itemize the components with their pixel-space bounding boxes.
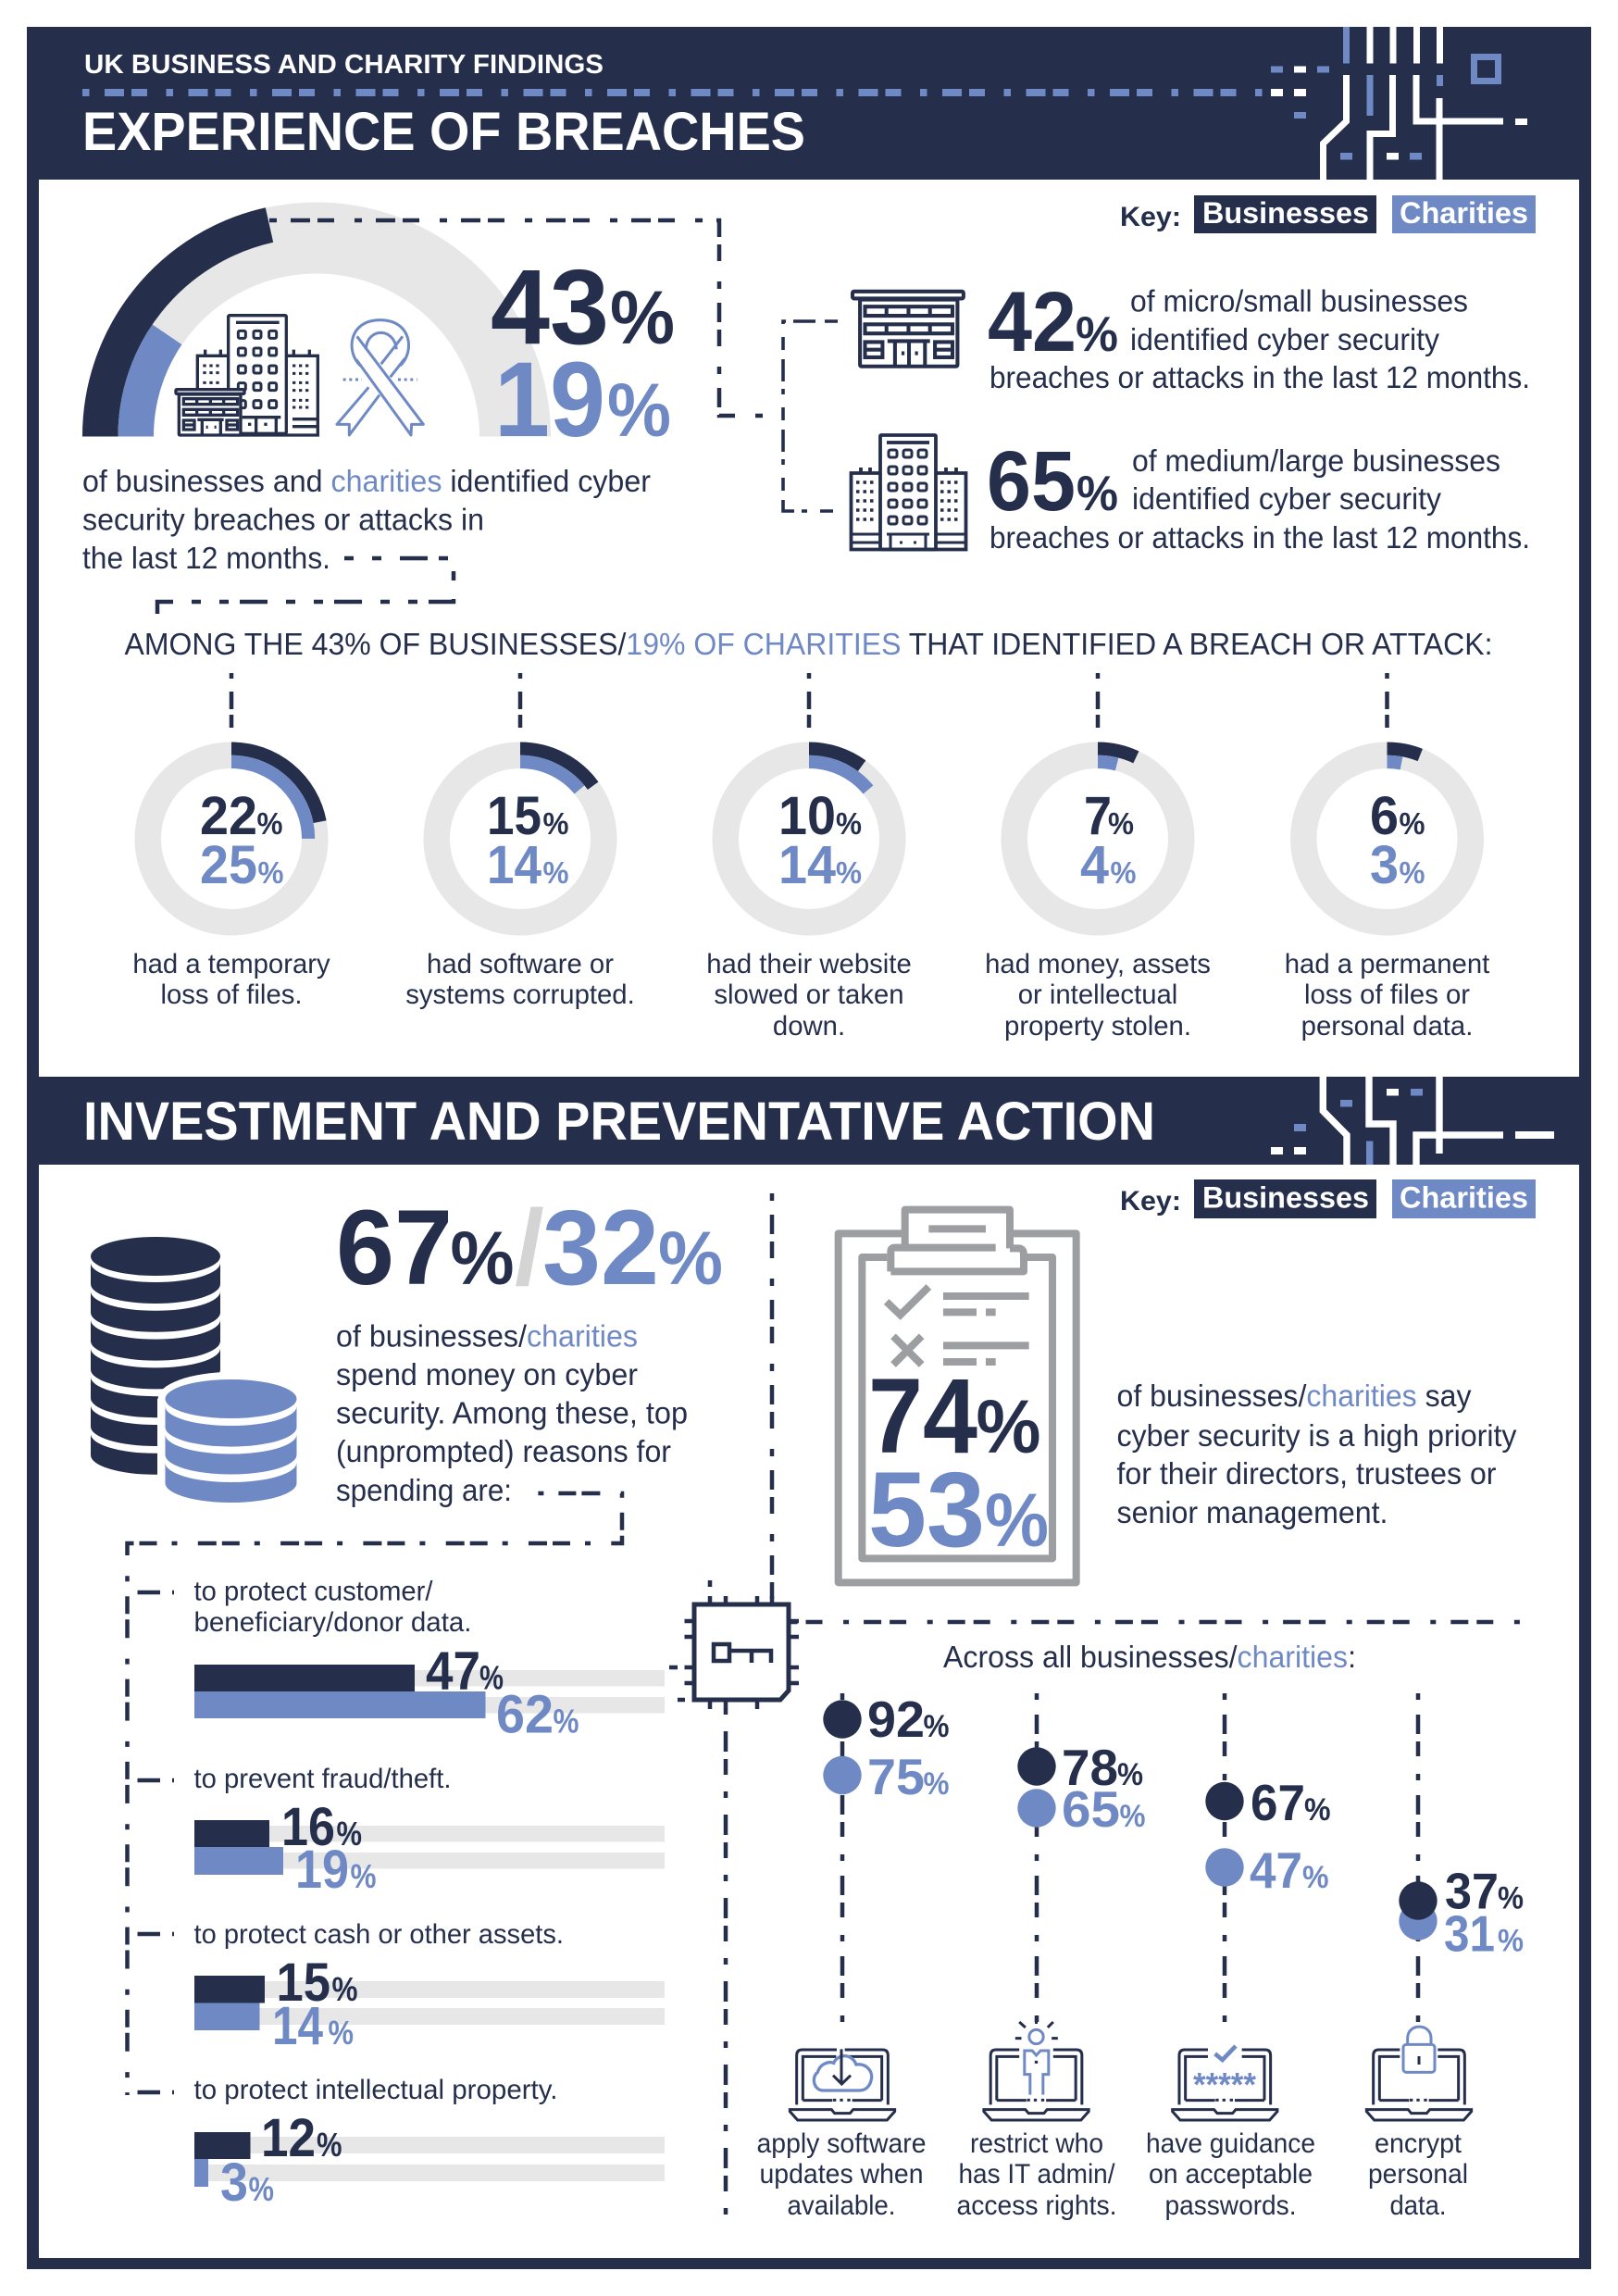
stat: micro/small businesses: 42 bbox=[988, 275, 1077, 369]
lollipop: password guidance: % bbox=[1302, 1860, 1329, 1895]
doughnut: temporary loss of files: % bbox=[257, 806, 283, 841]
doughnut: money stolen bbox=[985, 673, 1211, 1042]
header: investment and preventative action: INVESTMENT AND PREVENTATIVE ACTION bbox=[83, 1092, 1155, 1152]
stat: micro/small businesses: breaches or attacks in the last 12 months. bbox=[989, 360, 1530, 394]
doughnut: money stolen: property stolen. bbox=[1004, 1011, 1191, 1042]
doughnut: software corrupted: had software or bbox=[427, 949, 614, 980]
bar group: prevent fraud: to prevent fraud/theft. bbox=[194, 1764, 452, 1794]
big stat 19%: % bbox=[607, 368, 671, 453]
text: headline finding: the last 12 months. bbox=[82, 541, 330, 575]
lollipop: encrypt personal data: personal bbox=[1368, 2159, 1468, 2190]
text: high priority: senior management. bbox=[1116, 1495, 1388, 1529]
big stat 74%: % bbox=[976, 1385, 1040, 1469]
text: high priority: for their directors, trustees or bbox=[1116, 1456, 1496, 1491]
key: section one: Charities bbox=[1400, 196, 1528, 230]
bar group: protect customer data: to protect customer/ bbox=[194, 1576, 433, 1607]
doughnut: permanent loss: 6 bbox=[1370, 786, 1399, 846]
bar group: protect cash: 15 bbox=[276, 1953, 330, 2013]
doughnut: website slowed: % bbox=[836, 806, 862, 841]
bar group: prevent fraud: % bbox=[337, 1815, 362, 1853]
stat: micro/small businesses: of micro/small businesses bbox=[1130, 283, 1468, 318]
icon: charity ribbon bbox=[337, 320, 423, 435]
lollipop: restrict admin rights: access rights. bbox=[957, 2190, 1116, 2221]
big stat 19% bbox=[494, 341, 671, 459]
text: spending on cyber security: of businesses/charities bbox=[336, 1318, 638, 1354]
big stat 53% bbox=[868, 1451, 1049, 1569]
doughnut: software corrupted bbox=[405, 673, 635, 1010]
bar group: protect intellectual property: 3 bbox=[220, 2152, 248, 2213]
doughnut: permanent loss bbox=[1285, 673, 1489, 1042]
icon: chip with key bbox=[669, 1580, 799, 1709]
text: spending on cyber security bbox=[336, 1318, 688, 1507]
lollipop: apply software updates: updates when bbox=[759, 2159, 924, 2190]
connector: gauge to size breakdown bbox=[269, 220, 777, 416]
bar group: prevent fraud: 16 bbox=[281, 1797, 335, 1857]
text: spending on cyber security: spending are: bbox=[336, 1473, 512, 1507]
lollipop: apply software updates: apply software bbox=[757, 2128, 926, 2159]
big stat 43% bbox=[491, 248, 675, 367]
doughnut: permanent loss: had a permanent bbox=[1285, 949, 1489, 980]
icon: laptop with password: ***** bbox=[1193, 2065, 1256, 2103]
lollipop: encrypt personal data: % bbox=[1498, 1881, 1524, 1916]
doughnut: temporary loss of files: 25 bbox=[200, 835, 257, 895]
lollipop: apply software updates: 92 bbox=[867, 1691, 925, 1748]
lollipop: restrict admin rights: % bbox=[1120, 1799, 1146, 1834]
lollipop: encrypt personal data: % bbox=[1498, 1924, 1524, 1959]
text: spending on cyber security: spend money on cyber bbox=[336, 1357, 638, 1391]
big stat 74%: 74 bbox=[868, 1357, 977, 1476]
bar group: protect intellectual property bbox=[194, 2075, 665, 2213]
doughnut: website slowed bbox=[706, 673, 912, 1042]
text: high priority bbox=[1116, 1379, 1517, 1529]
lollipop: password guidance: 47 bbox=[1250, 1841, 1302, 1899]
lollipop: password guidance: on acceptable bbox=[1149, 2159, 1313, 2190]
doughnut: software corrupted: 14 bbox=[487, 835, 541, 895]
stat: medium/large businesses: of medium/large businesses bbox=[1132, 443, 1500, 478]
stat: micro/small businesses bbox=[853, 275, 1530, 394]
bar group: protect intellectual property: % bbox=[317, 2126, 342, 2164]
header: investment and preventative action bbox=[27, 1077, 1591, 1165]
big stat 74% bbox=[868, 1357, 1040, 1476]
doughnut: software corrupted: % bbox=[542, 806, 568, 841]
stat: medium/large businesses: breaches or attacks in the last 12 months. bbox=[989, 520, 1530, 555]
bar group: prevent fraud: % bbox=[350, 1857, 376, 1895]
doughnut: money stolen: % bbox=[1108, 806, 1134, 841]
key: section two: Key: bbox=[1120, 1186, 1181, 1217]
bar group: protect customer data bbox=[194, 1576, 665, 1744]
connector: text to subheading bbox=[157, 558, 454, 618]
doughnut: website slowed: 10 bbox=[778, 786, 836, 846]
doughnut: website slowed: 14 bbox=[778, 835, 836, 895]
doughnut: permanent loss: personal data. bbox=[1301, 1011, 1473, 1042]
bar group: protect intellectual property: 12 bbox=[261, 2108, 316, 2168]
connector: size breakdown bracket bbox=[783, 321, 838, 511]
icon: tall office building bbox=[852, 435, 966, 550]
doughnut: money stolen: 7 bbox=[1084, 786, 1112, 846]
doughnut: permanent loss: loss of files or bbox=[1304, 980, 1470, 1010]
bar group: protect customer data: % bbox=[479, 1659, 504, 1696]
big stat 67% / 32%: 67 bbox=[336, 1189, 453, 1307]
doughnut: permanent loss: % bbox=[1400, 855, 1425, 890]
stat: medium/large businesses: identified cyber security bbox=[1132, 481, 1441, 516]
big stat 19%: 19 bbox=[494, 341, 605, 459]
big stat 67% / 32%: / bbox=[515, 1189, 544, 1307]
text: high priority: of businesses/charities say bbox=[1116, 1379, 1472, 1413]
bar group: protect cash bbox=[194, 1919, 665, 2056]
lollipop: restrict admin rights bbox=[957, 1693, 1146, 2221]
doughnut: temporary loss of files: loss of files. bbox=[160, 980, 303, 1010]
big stat 53%: % bbox=[985, 1479, 1049, 1563]
lollipop: password guidance: passwords. bbox=[1164, 2190, 1296, 2221]
icon: office buildings bbox=[176, 316, 317, 435]
lollipop: encrypt personal data: encrypt bbox=[1375, 2128, 1462, 2159]
doughnut: money stolen: or intellectual bbox=[1018, 980, 1177, 1010]
icon: stacks of coins bbox=[91, 1237, 305, 1515]
lollipop: restrict admin rights: 78 bbox=[1062, 1739, 1118, 1796]
lollipop: password guidance bbox=[1146, 1693, 1331, 2221]
bar group: protect customer data: % bbox=[554, 1702, 579, 1741]
key: section one bbox=[1120, 195, 1536, 233]
icon: small office building bbox=[853, 292, 964, 367]
doughnut: software corrupted: 15 bbox=[487, 786, 541, 846]
stat: medium/large businesses bbox=[852, 434, 1530, 555]
key: section two bbox=[1120, 1179, 1536, 1218]
connector: spending reasons bbox=[128, 1493, 622, 2095]
doughnut: temporary loss of files: 22 bbox=[200, 786, 257, 846]
doughnut: website slowed: down. bbox=[773, 1011, 845, 1042]
lollipop: password guidance: % bbox=[1304, 1792, 1331, 1828]
icon: laptop with admin person bbox=[984, 2015, 1089, 2120]
subheading: among those identifying a breach: AMONG THE 43% OF BUSINESSES/19% OF CHARITIES THAT IDENTIFIED A BREACH OR ATTACK: bbox=[124, 627, 1492, 661]
text: across all businesses/charities: Across all businesses/charities: bbox=[943, 1640, 1356, 1674]
header title: EXPERIENCE OF BREACHES bbox=[82, 102, 805, 162]
doughnut: money stolen: % bbox=[1111, 855, 1137, 890]
icon: clipboard bbox=[839, 1210, 1077, 1582]
half-doughnut gauge 43% / 19% bbox=[100, 225, 515, 437]
key: section one: Key: bbox=[1120, 202, 1181, 232]
lollipop: restrict admin rights: restrict who bbox=[970, 2128, 1103, 2159]
text: headline finding: security breaches or attacks in bbox=[82, 502, 484, 537]
big stat 43%: 43 bbox=[491, 248, 609, 367]
header subtitle: UK BUSINESS AND CHARITY FINDINGS bbox=[84, 50, 604, 80]
text: spending on cyber security: (unprompted) reasons for bbox=[336, 1434, 671, 1468]
header circuit decoration bbox=[1271, 1077, 1554, 1165]
bar group: protect customer data: 47 bbox=[426, 1641, 480, 1702]
bar group: protect cash: % bbox=[331, 1970, 357, 2008]
doughnut: money stolen: 4 bbox=[1080, 835, 1109, 895]
stat: medium/large businesses: 65 bbox=[987, 434, 1076, 529]
bar group: protect intellectual property: to protect intellectual property. bbox=[194, 2075, 557, 2105]
lollipop: apply software updates: % bbox=[924, 1766, 950, 1802]
doughnut: website slowed: % bbox=[836, 855, 862, 890]
connector ticks to bars bbox=[137, 1592, 174, 2092]
text: spending on cyber security: security. Among these, top bbox=[336, 1396, 688, 1429]
bar group: protect cash: % bbox=[328, 2014, 354, 2052]
doughnut: temporary loss of files: had a temporary bbox=[132, 949, 330, 980]
icon: laptop with cloud download bbox=[790, 2049, 895, 2120]
bar group: protect customer data: 62 bbox=[496, 1685, 554, 1744]
connector: chip to across all panel bbox=[790, 1620, 1530, 1624]
lollipop: password guidance: have guidance bbox=[1146, 2128, 1315, 2159]
header circuit decoration bbox=[82, 27, 1527, 180]
bar group: protect cash: to protect cash or other assets. bbox=[194, 1919, 564, 1950]
text: headline finding bbox=[82, 464, 651, 575]
big stat 67% / 32%: % bbox=[658, 1217, 723, 1301]
doughnut: money stolen: had money, assets bbox=[985, 949, 1211, 980]
lollipop: apply software updates: available. bbox=[787, 2190, 896, 2221]
text: high priority: cyber security is a high priority bbox=[1116, 1418, 1517, 1453]
lollipop: encrypt personal data: 37 bbox=[1445, 1863, 1499, 1920]
connector: chip to bottom bbox=[724, 1708, 728, 2215]
bar group: protect intellectual property: % bbox=[248, 2170, 274, 2208]
header: experience of breaches bbox=[82, 27, 1527, 180]
doughnut: website slowed: slowed or taken bbox=[714, 980, 904, 1010]
lollipop: apply software updates: % bbox=[924, 1709, 950, 1744]
doughnut: website slowed: had their website bbox=[706, 949, 912, 980]
lollipop: apply software updates bbox=[757, 1691, 950, 2221]
key: section two: Charities bbox=[1400, 1181, 1528, 1215]
big stat 67% / 32% bbox=[336, 1189, 723, 1307]
lollipop: encrypt personal data: 31 bbox=[1444, 1905, 1495, 1963]
doughnut: permanent loss: 3 bbox=[1370, 835, 1399, 895]
lollipop: restrict admin rights: % bbox=[1117, 1757, 1143, 1792]
doughnut: temporary loss of files bbox=[132, 673, 330, 1010]
big stat 67% / 32%: 32 bbox=[542, 1189, 659, 1307]
stat: micro/small businesses: % bbox=[1076, 307, 1118, 362]
bar group: protect customer data: beneficiary/donor data. bbox=[194, 1607, 472, 1638]
icon: laptop with password bbox=[1173, 2046, 1277, 2120]
lollipop: restrict admin rights: has IT admin/ bbox=[959, 2159, 1115, 2190]
doughnut: temporary loss of files: % bbox=[257, 855, 283, 890]
lollipop: encrypt personal data bbox=[1366, 1693, 1524, 2221]
text: headline finding: of businesses and charities identified cyber bbox=[82, 464, 651, 498]
connector: divider from section top to chip bbox=[770, 1193, 774, 1603]
big stat 43%: % bbox=[610, 276, 675, 360]
bar group: protect cash: 14 bbox=[272, 1996, 323, 2056]
lollipop: encrypt personal data: data. bbox=[1390, 2190, 1446, 2221]
lollipop: apply software updates: 75 bbox=[867, 1748, 925, 1805]
doughnut: software corrupted: % bbox=[542, 855, 568, 890]
doughnut: permanent loss: % bbox=[1400, 806, 1425, 841]
bar group: prevent fraud: 19 bbox=[295, 1840, 349, 1900]
doughnut: software corrupted: systems corrupted. bbox=[405, 980, 635, 1010]
lollipop: password guidance: 67 bbox=[1251, 1774, 1305, 1831]
big stat 67% / 32%: % bbox=[450, 1217, 515, 1301]
key: section one: Businesses bbox=[1202, 196, 1369, 230]
big stat 53%: 53 bbox=[868, 1451, 985, 1569]
bar group: prevent fraud bbox=[194, 1764, 665, 1900]
icon: laptop with padlock bbox=[1366, 2027, 1472, 2120]
stat: medium/large businesses: % bbox=[1077, 467, 1118, 521]
key: section two: Businesses bbox=[1202, 1181, 1369, 1215]
stat: micro/small businesses: identified cyber security bbox=[1130, 322, 1439, 356]
lollipop: restrict admin rights: 65 bbox=[1062, 1780, 1120, 1838]
